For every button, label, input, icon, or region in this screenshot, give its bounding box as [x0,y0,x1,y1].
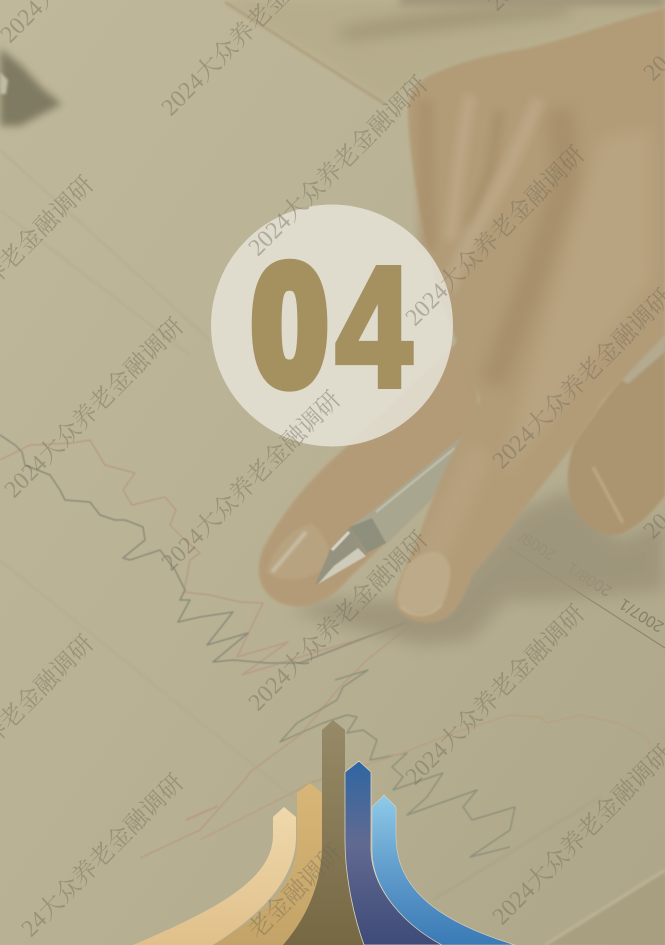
date label: 2009/ [516,527,559,563]
arrow: cream [133,807,296,945]
arrow: gold [213,783,322,945]
line: red rising series [140,623,413,858]
number 04: 0 [252,232,327,419]
watermark text grid: 2024大众养老金融调研 [243,71,433,261]
back of hand and middle finger [395,8,665,622]
rising arrows graphic [133,720,515,945]
pen barrel [350,436,462,543]
lower middle finger light [430,450,480,560]
pen collar [350,518,386,553]
line: short red segment [186,806,218,820]
dark shading along knuckle [492,108,566,385]
badge circle [211,204,453,446]
ridge of finger [450,95,470,240]
arrow: sky blue [372,795,515,945]
photo: hand holding pen [259,8,665,645]
arrow: navy [345,761,442,945]
nail highlight [272,532,306,572]
chart axis with date labels [508,527,665,648]
shadow beneath hand [290,490,665,645]
watermark text grid: 2024大众养老金融调研 [243,526,433,716]
light area on back of hand [500,130,650,480]
watermark text grid: 2024大众养老金融调研 [400,141,590,331]
middle fingernail [397,552,451,613]
chart lines printed on paper [0,435,665,858]
date label: 2008/1 [565,559,615,599]
watermark text grid: 24大众养老金融调研 [16,769,189,942]
watermark text grid: 老金融调研 [243,840,348,944]
thumb highlight [593,467,623,523]
watermark text grid: 2024大众养老金融调研 [0,313,189,503]
crease between fingers [470,110,500,225]
left finger shading [425,100,428,250]
pen nib [315,527,367,585]
number 04 [252,232,412,422]
line: red series upper [0,440,413,675]
index fingernail [266,524,329,579]
line: gray series upper [0,435,407,663]
pen tail [618,335,665,384]
number 04: 4 [336,232,412,422]
index finger [259,330,480,606]
nail rim [400,604,442,615]
ridge of finger [447,100,540,290]
watermark text grid: 2024大众养老金融调研 [156,386,346,576]
line: long red series [200,715,665,840]
watermark text grid: 2024大众养老金融调研 [400,600,590,790]
number badge [211,204,453,446]
thumb at right edge [568,340,665,535]
line: gray-green segment [280,670,515,857]
barrel highlight [376,448,455,512]
pen [315,436,462,585]
nib highlight [318,548,366,584]
arrow: center olive [283,720,364,945]
